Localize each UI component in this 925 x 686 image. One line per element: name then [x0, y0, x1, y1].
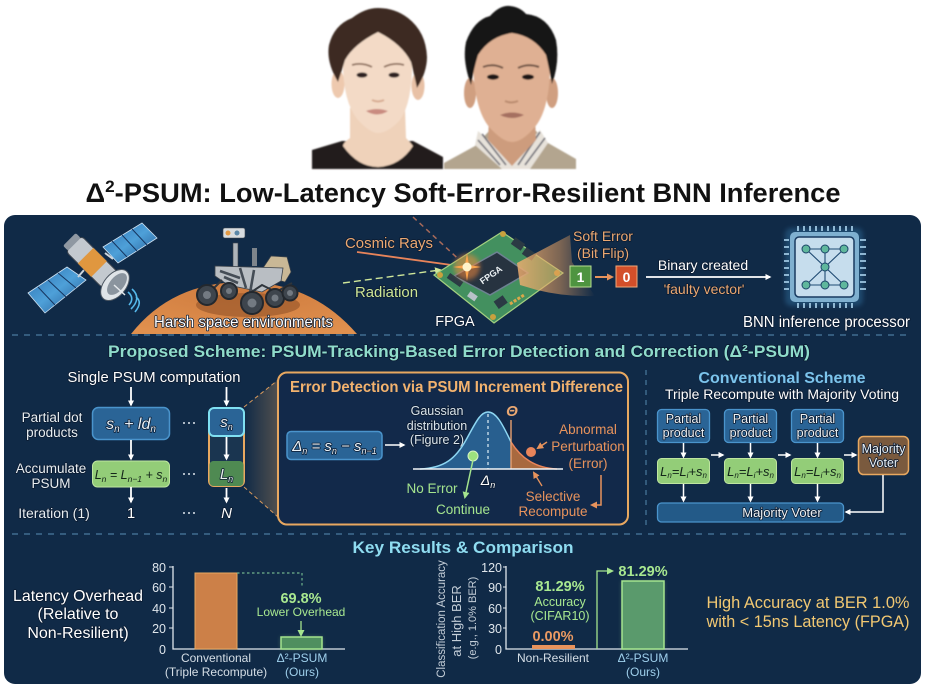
label: theta: Θ	[506, 403, 518, 420]
icon: bit 0	[616, 266, 637, 287]
box: accumulate 3: n	[801, 471, 806, 480]
box: accumulate 2: +s	[755, 464, 770, 479]
box: accumulate 2: n	[734, 471, 739, 480]
formula box: delta: Δ	[292, 438, 302, 455]
label: partial dot products: Partial dot	[22, 410, 83, 425]
box: accumulate 1: n	[702, 471, 707, 480]
axis labels	[517, 651, 668, 679]
label: single PSUM computation: Single PSUM computation	[68, 370, 240, 386]
chart: gaussian curve	[413, 412, 563, 469]
label: radiation: Radiation	[355, 285, 418, 301]
box: partial product 2	[724, 410, 776, 442]
label: FPGA: FPGA	[435, 314, 475, 330]
axis labels: Δ²-PSUM	[618, 651, 668, 665]
formula box: delta: n−1	[362, 446, 377, 456]
label: gaussian distribution: (Figure 2)	[410, 433, 464, 447]
icon: Mars planet with rover	[131, 228, 357, 334]
value: 81.29% right: 81.29%	[618, 564, 668, 580]
label: abnormal perturbation: (Error)	[568, 456, 608, 471]
arrow: to abnormal dot	[538, 442, 547, 448]
icon: zoom wedge over bit flip	[517, 235, 595, 296]
icon: BNN processor chip	[784, 226, 866, 308]
icon: FPGA board	[434, 231, 563, 323]
portrait: right person	[444, 6, 576, 169]
box: majority voter side: Voter	[869, 456, 898, 470]
arrow: elbow to result	[597, 571, 612, 649]
label: delta n axis: Δ	[481, 472, 490, 488]
panel: conventional scheme	[658, 370, 908, 522]
chart: latency overhead	[152, 561, 345, 679]
box: majority voter side	[858, 436, 908, 474]
box: accumulate 2: =L	[739, 464, 754, 479]
chart: classification accuracy: 120	[481, 561, 502, 575]
label: classification accuracy axis title	[436, 560, 479, 678]
iteration N: N	[221, 505, 232, 522]
arrows: conventional flow	[684, 443, 883, 512]
label: iteration: Iteration (1)	[18, 505, 90, 521]
panel: key results	[13, 539, 910, 679]
connector: dotted difference	[237, 573, 302, 588]
formula box: Ln accumulate	[92, 461, 170, 487]
axis labels: (Ours)	[285, 665, 319, 679]
formula box: sn + ldn	[92, 408, 170, 440]
formula box: delta: − s	[337, 438, 362, 455]
heading: key results: Key Results & Comparison	[352, 539, 574, 557]
box: accumulate 3: n	[836, 471, 841, 480]
label: classification accuracy axis title: Classification Accuracy	[436, 560, 448, 678]
bar: non-resilient	[532, 645, 575, 649]
formula box: Ln accumulate: L	[95, 468, 102, 482]
arrow: delta to distribution	[385, 444, 404, 446]
heading: proposed scheme: Proposed Scheme: PSUM-Tracking-Based Error Detection and Correction (Δ²-PSUM)	[108, 342, 810, 361]
box: accumulate 1: +s	[688, 464, 703, 479]
box: partial product 2: Partial	[733, 412, 768, 426]
label: selective recompute: Selective	[526, 489, 580, 504]
label: continue: Continue	[436, 502, 490, 517]
label: accuracy CIFAR10: (CIFAR10)	[530, 609, 590, 623]
arrows: flow down	[131, 387, 226, 502]
chart: latency overhead: 80	[152, 561, 166, 575]
value: 69.8%: 69.8%	[280, 591, 322, 607]
box: accumulate 1: =L	[672, 464, 687, 479]
axis labels	[165, 651, 327, 679]
formula box: Ln accumulate: n	[102, 474, 107, 484]
box: partial product 1: Partial	[666, 412, 701, 426]
chart: latency overhead: 60	[152, 581, 166, 595]
icon: FPGA board: FPGA	[478, 263, 505, 286]
axis labels: Δ²-PSUM	[277, 651, 327, 665]
formula box: sn + ldn: s	[106, 416, 114, 433]
label: delta n axis: n	[490, 480, 495, 490]
arrow: no error	[465, 460, 473, 497]
axis labels: (Ours)	[626, 665, 660, 679]
iteration 1: 1	[127, 505, 135, 522]
subheading: Triple Recompute with Majority Voting	[665, 386, 899, 402]
arrow: cosmic ray	[357, 252, 466, 267]
box: accumulate 1: L	[660, 464, 667, 479]
box: majority voter bottom: Majority Voter	[742, 505, 822, 520]
highlight column: sn and Ln	[209, 408, 244, 486]
box: partial product 2: product	[730, 426, 772, 440]
portrait: left person	[312, 8, 443, 169]
label: cosmic rays: Cosmic Rays	[345, 236, 433, 252]
label: abnormal perturbation: Abnormal	[559, 422, 617, 437]
heading: conventional scheme: Conventional Scheme	[698, 370, 866, 387]
title: Δ	[86, 178, 105, 208]
bar: delta PSUM	[281, 637, 322, 649]
box: accumulate 3	[792, 458, 844, 484]
value: 0.00%: 0.00%	[532, 629, 574, 645]
box: accumulate 1: i	[687, 471, 689, 480]
chart: classification accuracy: 30	[488, 622, 502, 636]
box: accumulate 3: i	[821, 471, 823, 480]
panel: error detection	[278, 372, 628, 524]
label: latency overhead: Non-Resilient)	[27, 625, 129, 642]
highlight column: sn and Ln: L	[220, 466, 228, 483]
arrow: bit flip	[595, 276, 612, 278]
formula box: sn + ldn: n	[150, 424, 156, 435]
label: BNN inference processor: BNN inference processor	[743, 314, 910, 331]
box: accumulate 2: n	[769, 471, 774, 480]
label: faulty vector: 'faulty vector'	[664, 281, 744, 297]
formula box: delta: = s	[307, 438, 332, 455]
label: accumulate PSUM: Accumulate	[16, 461, 86, 476]
box: accumulate 3: =L	[806, 464, 821, 479]
label: soft error: Soft Error	[573, 228, 633, 244]
label: binary created: Binary created	[658, 257, 748, 273]
zoom connector to detection panel	[244, 380, 278, 517]
chart: latency overhead: 0	[159, 643, 166, 657]
chart: latency overhead: 40	[152, 602, 166, 616]
title: 2	[105, 177, 115, 196]
arrow: error to recompute	[592, 475, 601, 505]
icon: impact flash	[453, 253, 481, 281]
chart: classification accuracy: 0	[495, 643, 502, 657]
icon: bit 1	[570, 266, 591, 287]
box: accumulate 3: L	[794, 464, 801, 479]
label: gaussian distribution: distribution	[407, 419, 467, 433]
arrow: dashed ray from above	[413, 217, 466, 266]
axis labels: Non-Resilient	[517, 651, 590, 665]
formula box: delta: n	[302, 446, 307, 456]
highlight column: sn and Ln: n	[228, 474, 233, 484]
box: partial product 3: product	[797, 426, 839, 440]
formula box: Ln accumulate: n−1	[128, 474, 142, 484]
icon: satellite	[28, 223, 157, 313]
formula box: sn + ldn: + ld	[120, 416, 151, 433]
flow: single PSUM computation	[16, 370, 244, 522]
formula box: delta	[287, 432, 382, 460]
axis labels: Conventional	[181, 651, 251, 665]
label: accuracy CIFAR10: Accuracy	[534, 595, 586, 609]
bar: conventional	[195, 573, 237, 649]
highlight column: sn and Ln: n	[228, 422, 233, 432]
highlight column: sn and Ln: s	[220, 414, 228, 431]
icon: bit 1: 1	[577, 269, 585, 285]
box: accumulate 1: n	[667, 471, 672, 480]
box: majority voter side: Majority	[862, 442, 906, 456]
arrow: radiation	[343, 270, 440, 283]
chart: classification accuracy: 60	[488, 602, 502, 616]
arrow: to processor	[646, 276, 770, 278]
axis labels: (Triple Recompute)	[165, 665, 267, 679]
box: partial product 3	[792, 410, 844, 442]
formula box: Ln accumulate: n	[163, 474, 168, 484]
label: latency overhead: Latency Overhead	[13, 588, 143, 605]
label: selective recompute: Recompute	[518, 504, 588, 519]
label: soft error: (Bit Flip)	[577, 245, 629, 261]
label: harsh space environments: Harsh space environments	[154, 314, 333, 331]
panel: main dark background	[4, 215, 921, 684]
chart: latency overhead: 20	[152, 622, 166, 636]
chart: classification accuracy: 90	[488, 581, 502, 595]
box: majority voter bottom	[658, 503, 844, 522]
chart: classification accuracy	[481, 561, 688, 679]
box: accumulate 2	[724, 458, 776, 484]
formula box: Ln accumulate: + s	[142, 468, 163, 482]
formula box: delta: n	[332, 446, 337, 456]
box: accumulate 1	[658, 458, 710, 484]
label: classification accuracy axis title: (e.g., 1.0% BER)	[467, 577, 479, 659]
box: accumulate 2: L	[727, 464, 734, 479]
label: latency overhead: (Relative to	[38, 606, 119, 623]
panel: harsh space environment row	[28, 217, 910, 334]
arrow: to bar	[300, 621, 302, 635]
label: abnormal perturbation: Perturbation	[551, 439, 625, 454]
ellipsis row	[183, 422, 195, 514]
label: accumulate PSUM: PSUM	[31, 476, 71, 491]
label: gaussian distribution: Gaussian	[411, 404, 463, 418]
title: -PSUM: Low-Latency Soft-Error-Resilient BNN Inference	[115, 178, 841, 208]
heading: error detection: Error Detection via PSUM Increment Difference	[290, 379, 623, 396]
callout: high accuracy: with < 15ns Latency (FPGA)	[706, 613, 910, 631]
arrow: to tail	[534, 473, 542, 486]
label: lower overhead: Lower Overhead	[257, 605, 345, 619]
formula box: Ln accumulate: = L	[106, 468, 128, 482]
box: partial product 3: Partial	[800, 412, 835, 426]
formula box: sn + ldn: n	[114, 424, 120, 435]
panel: proposed scheme	[16, 342, 810, 524]
box: accumulate 3: +s	[822, 464, 837, 479]
label: partial dot products: products	[26, 425, 78, 440]
box: partial product 1	[658, 410, 710, 442]
label: classification accuracy axis title: at High BER	[449, 585, 464, 657]
value: 81.29% left: 81.29%	[535, 579, 585, 595]
label: no error: No Error	[406, 481, 458, 496]
icon: bit 0: 0	[623, 269, 631, 285]
bar: delta PSUM accuracy	[622, 581, 664, 649]
box: accumulate 2: i	[754, 471, 756, 480]
callout: high accuracy: High Accuracy at BER 1.0%	[706, 594, 910, 612]
box: partial product 1: product	[663, 426, 705, 440]
